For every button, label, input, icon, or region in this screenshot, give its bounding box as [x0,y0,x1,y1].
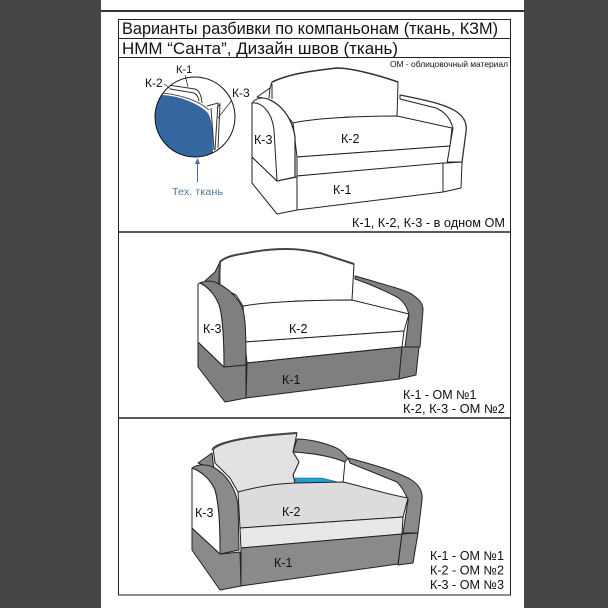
sofa 2 label K-2: К-2 [289,322,307,336]
sofa 1 label K-2: К-2 [341,132,359,146]
sofa 2 legend [403,388,505,416]
sofa 3 label K-1: К-1 [274,556,292,570]
sofa 3 legend: К-1 - ОМ №1 [430,549,504,563]
note: material abbreviation: ОМ - облицовочный материал [390,59,508,69]
sofa 3: three-material variant with cutaway [192,433,422,590]
icon: blue technical fabric [156,94,213,156]
title: line two: НММ “Санта”, Дизайн швов (ткань) [122,40,398,58]
right dark page margin [524,0,608,608]
sofa 2 legend: К-2, К-3 - ОМ №2 [403,402,505,416]
detail label K-3: К-3 [232,86,250,100]
detail label K-1: К-1 [176,64,192,76]
top rule [101,10,524,12]
icon: blue inner layer [295,478,338,484]
sofa 2 legend: К-1 - ОМ №1 [403,388,477,402]
label: technical fabric: Тех. ткань [172,186,224,198]
outer frame with section rows [118,20,511,595]
sofa 2 label K-3: К-3 [203,322,221,336]
sofa 3 legend [430,549,504,592]
panel 1: detail circle [150,75,235,160]
sofa 1 label K-3: К-3 [254,133,272,147]
sofa 2 label K-1: К-1 [282,373,300,387]
sofa 1 label K-1: К-1 [333,183,351,197]
left dark page margin [0,0,101,608]
sofa 1: outline variant [252,68,466,214]
sofa 3 label K-3: К-3 [195,506,213,520]
sofa 3 legend: К-2 - ОМ №2 [430,564,504,578]
arrow to technical fabric [195,158,200,182]
sofa 3 label K-2: К-2 [282,505,300,519]
title: line one: Варианты разбивки по компаньонам (ткань, КЗМ) [122,20,498,38]
sofa 1 legend: К-1, К-2, К-3 - в одном ОМ [352,216,505,230]
detail label K-2: К-2 [145,76,163,90]
sofa 3 legend: К-3 - ОМ №3 [430,578,504,592]
sofa 2: two-material variant [198,249,423,402]
